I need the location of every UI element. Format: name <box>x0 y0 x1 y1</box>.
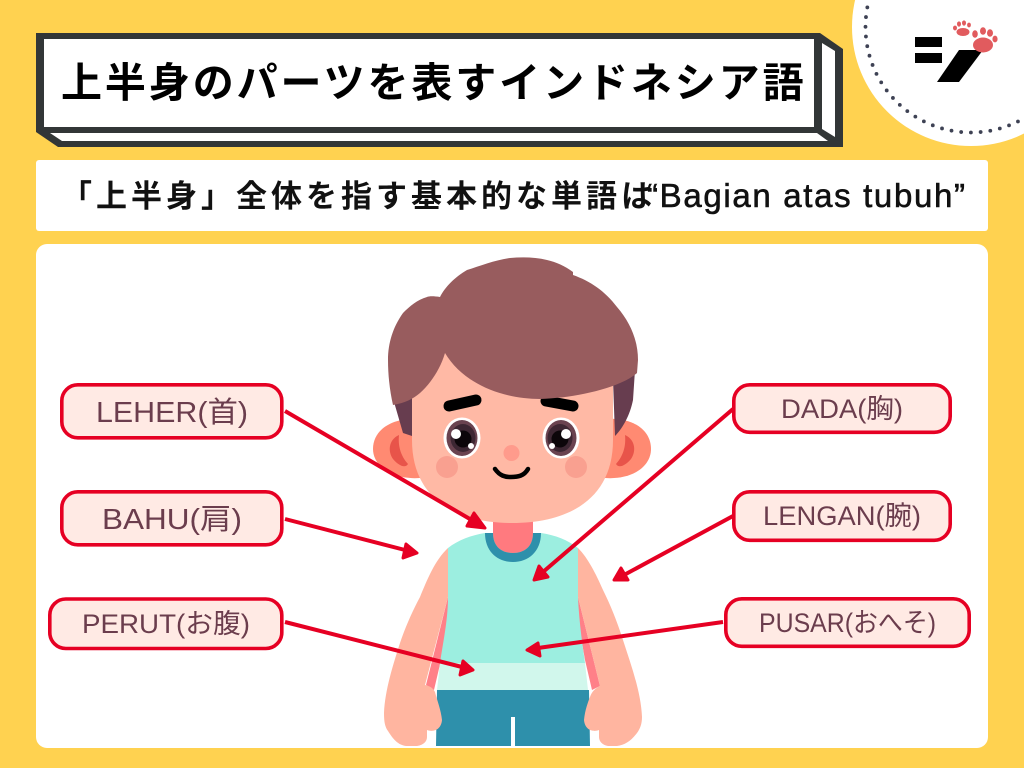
ears <box>373 419 651 478</box>
logo badge <box>852 0 1024 146</box>
label: LENGAN <box>734 492 950 540</box>
subtitle band: “Bagian atas tubuh” <box>647 177 965 214</box>
label: LEHER: LEHER(首) <box>96 396 248 429</box>
label: BAHU <box>62 492 282 545</box>
label: DADA: DADA(胸) <box>781 394 903 424</box>
back hair <box>392 370 635 436</box>
arrow: chest <box>534 409 733 580</box>
cheeks <box>436 456 587 478</box>
label: BAHU: BAHU(肩) <box>102 504 242 536</box>
arrow: arm <box>614 516 733 580</box>
left eye <box>444 418 480 458</box>
subtitle band: 「上半身」全体を指す基本的な単語は <box>61 179 656 214</box>
label: LEHER <box>62 385 282 438</box>
title banner: 上半身のパーツを表すインドネシア語 <box>61 60 806 106</box>
arm shadows <box>426 597 600 690</box>
arrow: navel <box>527 622 723 656</box>
neck <box>493 515 533 553</box>
tank top <box>440 533 585 663</box>
arrow: shoulder <box>285 519 417 558</box>
collar <box>485 533 541 562</box>
arrow: stomach <box>285 622 473 675</box>
main panel <box>36 244 988 748</box>
label: PERUT: PERUT(お腹) <box>82 609 250 639</box>
subtitle band <box>36 160 988 231</box>
shorts <box>436 690 590 746</box>
arrow: neck <box>285 411 485 528</box>
eyebrows <box>449 400 573 406</box>
mouth <box>495 469 528 477</box>
nose <box>504 445 520 461</box>
label: DADA <box>734 385 950 432</box>
right eye <box>542 418 580 458</box>
label: PUSAR <box>726 599 969 646</box>
left arm <box>384 548 448 746</box>
front hair <box>388 257 638 405</box>
right arm <box>578 548 642 746</box>
label: PUSAR: PUSAR(おへそ) <box>759 608 936 638</box>
title banner <box>36 33 843 147</box>
face <box>412 340 613 523</box>
label: LENGAN: LENGAN(腕) <box>763 501 921 531</box>
character illustration <box>373 257 651 746</box>
waistband <box>437 663 588 690</box>
label: PERUT <box>50 599 282 648</box>
